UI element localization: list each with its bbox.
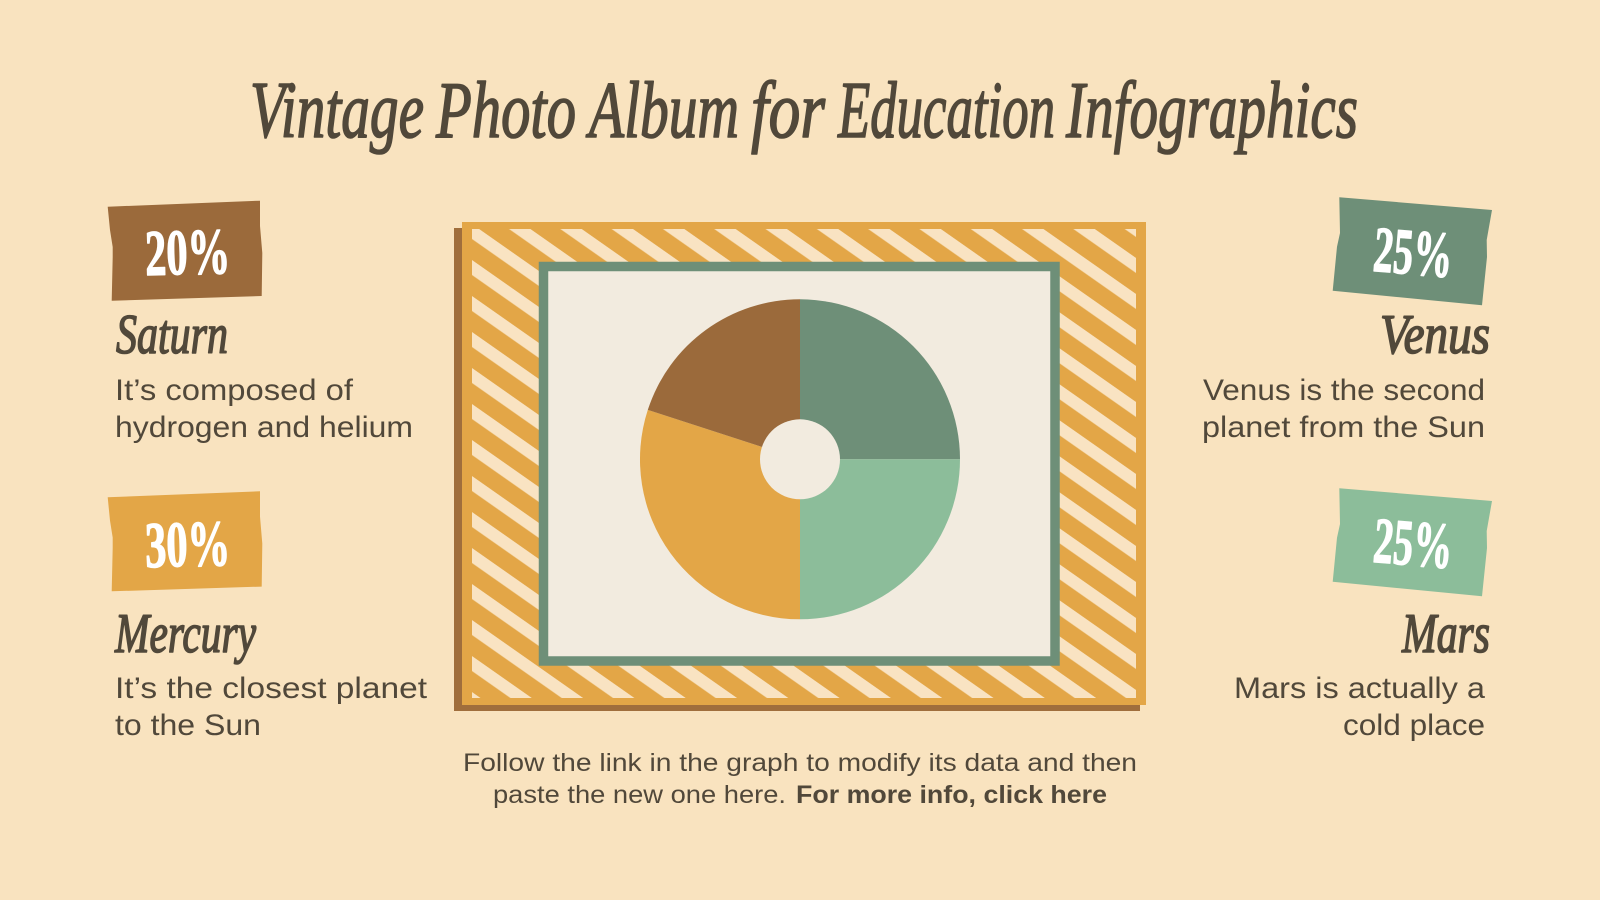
description: Mars: cold place <box>1343 709 1485 742</box>
title: Education <box>837 67 1055 155</box>
description: Saturn: It’s composed of <box>115 374 354 407</box>
panel: Venus <box>1202 197 1492 444</box>
title: for <box>751 67 826 155</box>
tag: Mercury 30% <box>108 491 262 591</box>
caption: For more info, click here <box>796 781 1107 809</box>
tag: Saturn 20%: 20% <box>144 216 231 290</box>
panel: photo frame with pie chart <box>454 222 1146 711</box>
heading: Saturn: Saturn <box>116 304 228 366</box>
description: Mercury: to the Sun <box>115 709 261 742</box>
green photo border and mat <box>544 266 1055 661</box>
description: Saturn: hydrogen and helium <box>115 411 413 444</box>
title: Vintage <box>250 67 424 155</box>
title <box>250 67 1358 155</box>
title: Infographics <box>1065 67 1358 155</box>
slice: Mars 25% <box>800 459 960 619</box>
slice: Saturn 20% <box>648 299 800 459</box>
tag: Mercury 30%: 30% <box>144 508 231 582</box>
tag: Venus 25%: 25% <box>1371 214 1456 292</box>
tag: Saturn 20% <box>108 201 262 301</box>
caption <box>463 749 1137 809</box>
title: Album <box>585 67 739 155</box>
description: Venus: Venus is the second <box>1203 374 1485 407</box>
pie centre hole <box>760 419 840 499</box>
tag: Venus 25% <box>1333 197 1492 305</box>
heading: Mars: Mars <box>1401 603 1490 665</box>
description: Mars <box>1234 672 1485 742</box>
heading: Venus: Venus <box>1380 304 1490 366</box>
description: Mercury <box>115 672 428 742</box>
description: Mercury: It’s the closest planet <box>115 672 428 705</box>
striped orange frame <box>462 222 1146 705</box>
description: Mars: Mars is actually a <box>1234 672 1485 705</box>
tag: Mars 25%: 25% <box>1371 505 1456 583</box>
description: Venus <box>1202 374 1485 444</box>
panel: Mercury <box>108 491 428 742</box>
caption: Follow the link in the graph to modify its data and then <box>463 749 1137 777</box>
pie chart <box>640 299 960 619</box>
panel: Saturn <box>108 201 413 444</box>
description: Venus: planet from the Sun <box>1202 411 1485 444</box>
panel: Mars <box>1234 488 1492 742</box>
caption: paste the new one here. <box>493 781 786 809</box>
frame shadow <box>454 228 1140 711</box>
slice: Venus 25% <box>800 299 960 459</box>
description: Saturn <box>115 374 413 444</box>
title: Photo <box>435 67 576 155</box>
slice: Mercury 30% <box>640 410 800 619</box>
heading: Mercury: Mercury <box>114 603 256 665</box>
tag: Mars 25% <box>1333 488 1492 596</box>
